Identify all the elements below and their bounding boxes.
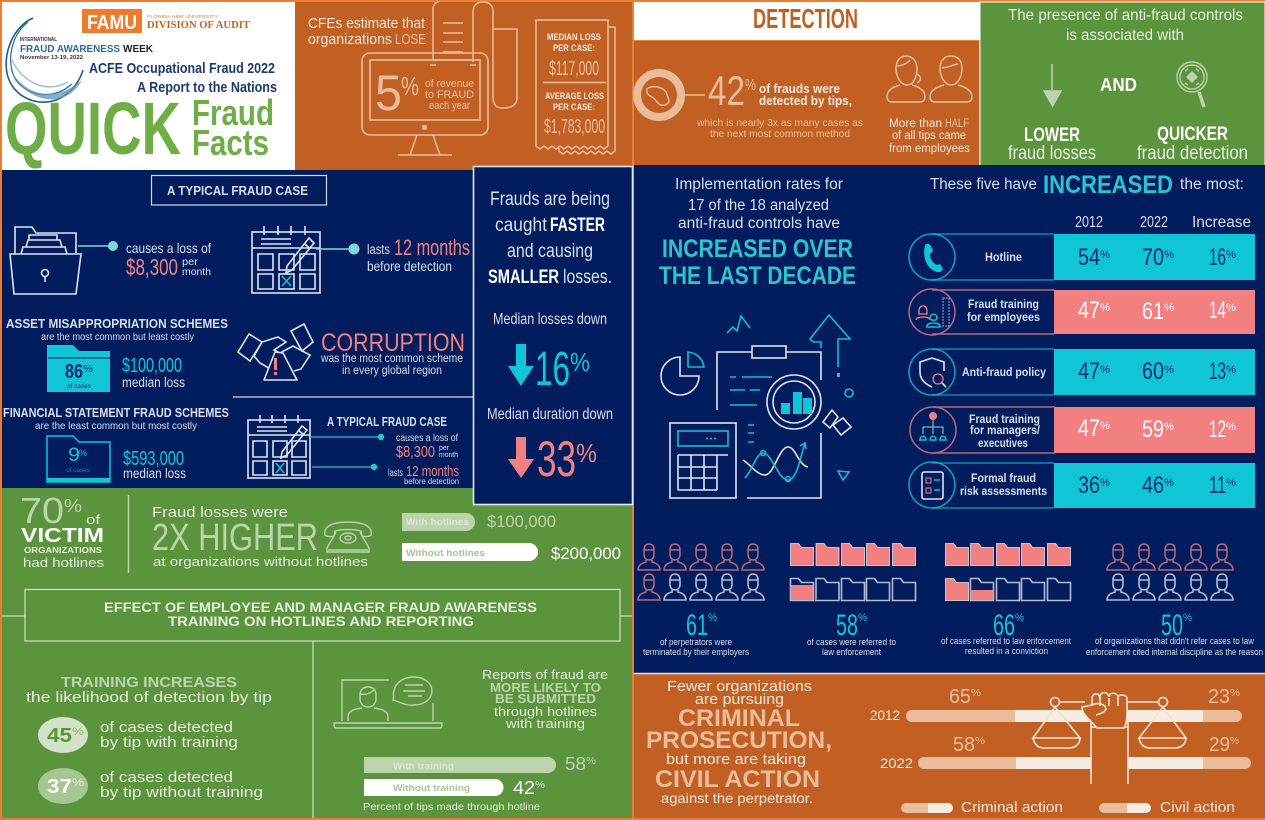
stat: 5% of revenue: of revenue <box>425 78 474 90</box>
panel: implementation rates <box>634 165 1265 673</box>
heading: implementation rates: anti-fraud controls have <box>678 215 840 232</box>
callout: duration <box>316 235 470 274</box>
callout: corruption <box>320 329 465 377</box>
callout: typical fraud case summary: A TYPICAL FRAUD CASE <box>327 415 447 429</box>
text: CFEs estimate <box>308 15 426 48</box>
heading: frauds caught faster <box>488 189 612 288</box>
table row: anti-fraud policy: 13 <box>1209 358 1226 385</box>
chart: tips through hotline <box>363 754 596 813</box>
heading: these five increased: the most: <box>1180 176 1244 193</box>
pictogram: 61% terminated: of perpetrators were <box>660 637 732 648</box>
icon: handshake with warning <box>238 324 313 380</box>
heading: these five increased: INCREASED <box>1043 171 1173 199</box>
table row: fraud training for employees: Fraud training <box>968 299 1039 311</box>
stat: median duration down 33%: % <box>576 438 597 468</box>
callout: loss per month: $8,300 <box>126 254 178 280</box>
receipt: loss per case: $117,000 <box>549 58 599 80</box>
text: criminal prosecution statement: PROSECUTION, <box>646 727 832 754</box>
table row: fraud training for employees: 14 <box>1209 297 1226 324</box>
text: reports more likely: MORE LIKELY TO <box>490 681 601 695</box>
block: financial statement fraud schemes: are the least common but most costly <box>35 420 198 432</box>
table row: fraud training for managers: for managers/ <box>970 425 1041 437</box>
stat: 70% victim organizations: % <box>64 496 82 516</box>
label: quicker fraud detection: fraud detection <box>1137 143 1248 164</box>
callout: typical fraud case summary: causes a loss of <box>396 433 458 444</box>
chart: 2022 action bar: 29 <box>1209 734 1230 756</box>
heading: frauds caught faster: losses. <box>563 267 612 288</box>
text: reports more likely: with training <box>505 717 585 731</box>
callout: duration: 12 months <box>394 235 470 260</box>
table row: hotline: 54 <box>1078 244 1100 271</box>
icon: fist holding scales <box>1033 692 1186 784</box>
text: criminal prosecution statement: are pursuing <box>695 691 784 708</box>
stat: 42% detected by tips: detected by tips, <box>759 94 852 108</box>
heading: a typical fraud case: A TYPICAL FRAUD CASE <box>167 183 308 198</box>
chart: tips through hotline: % <box>535 780 545 791</box>
title: Quick Fraud Facts: Facts <box>192 122 269 163</box>
label: lower fraud losses: fraud losses <box>1008 143 1096 164</box>
chart: tips through hotline: Percent of tips made through hotline <box>363 802 540 813</box>
chart: losses by hotline <box>402 512 621 563</box>
stat: 2x higher: 2X HIGHER <box>152 517 318 559</box>
heading: implementation rates: Implementation rates for <box>675 176 843 193</box>
heading: implementation rates: THE LAST DECADE <box>659 262 856 290</box>
block: training increases detection: TRAINING INCREASES <box>61 675 237 691</box>
callout: typical fraud case summary: before detection <box>404 477 459 486</box>
label: quicker fraud detection: QUICKER <box>1157 124 1228 145</box>
table row: hotline <box>909 234 1255 280</box>
logo: Fraud Awareness Week swoosh <box>6 18 154 102</box>
table row: anti-fraud policy: % <box>1226 364 1236 376</box>
stat: 5% of revenue: each year <box>429 100 470 112</box>
divider <box>233 396 473 398</box>
chart: tips through hotline: 42 <box>513 778 535 798</box>
receipt: loss per case: $1,783,000 <box>544 116 605 138</box>
panel: detection heading: DETECTION <box>753 3 858 34</box>
pictogram: 61% terminated: terminated by their employers <box>643 647 749 658</box>
heading: frauds caught faster: and causing <box>507 241 593 262</box>
table row: fraud training for employees <box>909 289 1255 335</box>
table row: hotline: 70 <box>1142 244 1164 271</box>
title: Quick Fraud Facts: Fraud <box>192 92 274 133</box>
chart: tips through hotline: % <box>586 756 596 767</box>
table header <box>1075 214 1251 231</box>
table row: fraud training for employees: 61 <box>1142 298 1164 325</box>
chart: losses by hotline: $200,000 <box>551 544 621 563</box>
block: asset misappropriation schemes: median loss <box>122 375 185 390</box>
table row: formal fraud risk assessments: % <box>1100 477 1110 489</box>
chart: 2022 action bar: 2022 <box>880 756 913 771</box>
heading: presence of controls: is associated with <box>1066 27 1184 44</box>
block: training increases detection: the likelihood of detection by tip <box>26 689 272 706</box>
callout: corruption: was the most common scheme <box>320 353 463 365</box>
callout: typical fraud case summary: per <box>439 445 450 452</box>
icon: telephone <box>325 522 371 552</box>
table row: hotline: % <box>1226 249 1236 261</box>
callout: loss per month: causes a loss of <box>126 240 211 256</box>
pictogram: 58% referred: 58 <box>836 609 858 642</box>
table row: anti-fraud policy: % <box>1100 364 1110 376</box>
table row: formal fraud risk assessments: % <box>1226 477 1236 489</box>
stat: median losses down 16%: Median losses down <box>493 311 607 328</box>
text: half of tips from employees: of all tips came <box>892 130 966 142</box>
logo: FAMU Division of Audit: FAMU <box>87 12 137 34</box>
callout: loss per month: per <box>182 256 199 268</box>
callout: typical fraud case summary: lasts <box>388 468 403 479</box>
text: criminal prosecution statement: against the perpetrator. <box>661 790 813 806</box>
block: asset misappropriation schemes: 86 <box>65 361 83 383</box>
icon: magnifier <box>1177 62 1207 107</box>
stat: median duration down 33%: Median duration down <box>487 406 613 423</box>
text: half of tips from employees: HALF <box>945 118 969 130</box>
heading: frauds caught faster: SMALLER <box>488 267 559 288</box>
pictogram: 58% referred: law enforcement <box>822 647 881 658</box>
logo: Fraud Awareness Week swoosh: November 13-19, 2022 <box>20 55 83 61</box>
label: lower fraud losses: LOWER <box>1024 125 1080 146</box>
table row: formal fraud risk assessments: 11 <box>1209 472 1226 499</box>
stat: 5% of revenue: % <box>401 71 419 101</box>
heading: presence of controls <box>1008 7 1243 44</box>
icon: file folder <box>10 227 81 294</box>
text: and: AND <box>1100 75 1137 95</box>
illustration: audit clipboard, magnifier and calculator <box>661 315 853 498</box>
icon: whistle ring <box>637 73 705 117</box>
panel: faster and smaller <box>474 166 632 504</box>
text: CFEs estimate: CFEs estimate that <box>308 15 426 32</box>
legend: criminal and civil action <box>901 800 1235 816</box>
callout: loss per month <box>78 240 211 280</box>
callout: corruption: CORRUPTION <box>321 329 465 357</box>
stat: median duration down 33%: 33 <box>537 431 576 487</box>
legend: criminal and civil action: Criminal action <box>961 800 1063 816</box>
receipt: loss per case <box>536 20 615 154</box>
chart: losses by hotline: $100,000 <box>487 512 556 531</box>
block: asset misappropriation schemes: $100,000 <box>122 355 182 377</box>
table row: fraud training for employees: % <box>1164 302 1174 314</box>
stat: median losses down 16% <box>493 311 607 396</box>
table row: formal fraud risk assessments: Formal fraud <box>971 473 1036 485</box>
chart: tips through hotline: Without training <box>393 783 470 794</box>
stat: 42% detected by tips: % <box>745 77 756 94</box>
table row: anti-fraud policy <box>909 349 1255 395</box>
pictogram: 66% conviction <box>941 544 1071 657</box>
table row: fraud training for managers: Fraud training <box>969 414 1040 426</box>
callout: duration: before detection <box>367 259 452 274</box>
table row: anti-fraud policy: Anti-fraud policy <box>962 367 1047 379</box>
logo: FAMU Division of Audit <box>82 9 251 34</box>
pictogram: 61% terminated <box>638 544 764 658</box>
heading: effect of training <box>2 590 632 818</box>
report title: ACFE Occupational Fraud 2022 <box>89 60 275 77</box>
text: criminal prosecution statement: CIVIL ACTION <box>655 766 820 793</box>
block: financial statement fraud schemes <box>3 405 229 482</box>
pictogram: 58% referred: % <box>858 612 867 624</box>
heading: implementation rates: 17 of the 18 analyzed <box>688 197 829 214</box>
callout: typical fraud case summary: $8,300 <box>396 444 435 461</box>
stat: 70% victim organizations: ORGANIZATIONS <box>24 546 103 555</box>
text: half of tips from employees <box>889 118 970 155</box>
chart: 2012 action bar: 23 <box>1208 686 1230 708</box>
text: criminal prosecution statement: Fewer organizations <box>667 678 812 695</box>
table row: fraud training for employees: % <box>1100 302 1110 314</box>
table row: anti-fraud policy: % <box>1164 364 1174 376</box>
stat: 5% of revenue <box>375 65 474 121</box>
block: training increases detection: 37 <box>47 776 72 798</box>
stat: median losses down 16%: 16 <box>535 343 570 396</box>
stat: 42% detected by tips: 42 <box>708 67 745 114</box>
heading: frauds caught faster: caught <box>495 215 548 236</box>
table row: fraud training for managers: % <box>1164 421 1174 433</box>
text: reports more likely: Reports of fraud are <box>482 668 608 682</box>
stat: 70% victim organizations: of <box>86 512 100 527</box>
heading: frauds caught faster: FASTER <box>550 215 605 236</box>
stat: 2x higher <box>152 505 369 569</box>
pictogram: 58% referred <box>790 544 916 658</box>
text: reports more likely: through hotlines <box>494 705 597 719</box>
pictogram: 50% internal discipline <box>1086 544 1263 658</box>
table row: formal fraud risk assessments <box>909 462 1255 508</box>
table header: 2012 <box>1075 214 1103 231</box>
block: financial statement fraud schemes: median loss <box>123 466 186 481</box>
table row: anti-fraud policy: 47 <box>1078 358 1100 385</box>
stat: 2x higher: Fraud losses were <box>152 505 288 521</box>
text: half of tips from employees: from employees <box>889 143 970 155</box>
block: asset misappropriation schemes <box>6 316 228 392</box>
block: training increases detection: of cases detected <box>100 720 233 736</box>
table row: fraud training for managers: 12 <box>1209 416 1226 443</box>
block: financial statement fraud schemes: % <box>79 448 87 458</box>
panel: hotlines and training <box>2 488 632 818</box>
table row: fraud training for managers: % <box>1226 421 1236 433</box>
logo: FAMU Division of Audit: DIVISION OF AUDIT <box>147 19 251 31</box>
chart: 2022 action bar: % <box>975 736 985 747</box>
block: training increases detection: % <box>72 726 84 738</box>
chart: 2012 action bar: % <box>1230 688 1240 699</box>
receipt: loss per case: MEDIAN LOSS <box>547 32 601 43</box>
table row: fraud training for managers: 47 <box>1078 415 1100 442</box>
stat: 70% victim organizations <box>20 490 105 570</box>
receipt: loss per case: PER CASE: <box>553 102 595 113</box>
panel: cost of fraud <box>295 2 632 170</box>
table row: hotline: % <box>1100 249 1110 261</box>
block: training increases detection: % <box>72 777 84 789</box>
stat: 5% of revenue: 5 <box>375 65 402 121</box>
label: quicker fraud detection <box>1137 124 1248 164</box>
panel: masthead <box>2 2 295 170</box>
text: CFEs estimate: organizations <box>308 31 392 48</box>
table row: fraud training for employees: % <box>1226 302 1236 314</box>
text: criminal prosecution statement: CRIMINAL <box>678 705 800 732</box>
logo: Fraud Awareness Week swoosh: FRAUD AWARENESS <box>20 44 120 55</box>
logo: FAMU Division of Audit: FLORIDA A&M UNIVERSITY <box>147 14 218 19</box>
icon: calendar with pen <box>248 415 310 478</box>
chart: losses by hotline: Without hotlines <box>406 548 485 558</box>
stat: median duration down 33% <box>487 406 613 487</box>
stat: 2x higher: at organizations without hotlines <box>153 554 369 569</box>
table row: hotline: % <box>1164 249 1174 261</box>
panel: detection by tips <box>634 41 979 165</box>
table row: formal fraud risk assessments: risk assessments <box>960 486 1047 498</box>
title: Quick Fraud Facts: QUICK <box>5 87 181 170</box>
chart: 2022 action bar <box>880 734 1251 771</box>
icon: person at laptop with speech bubble <box>334 677 442 728</box>
block: training increases detection <box>26 675 272 804</box>
heading: frauds caught faster: Frauds are being <box>490 189 610 210</box>
heading: effect of training: TRAINING ON HOTLINES AND REPORTING <box>168 614 474 629</box>
pictogram: 61% terminated: 61 <box>686 609 708 642</box>
pictogram: 66% conviction: % <box>1015 612 1024 624</box>
pictogram: 50% internal discipline: % <box>1183 612 1192 624</box>
receipt: loss per case: AVERAGE LOSS <box>545 91 604 102</box>
icon: calendar with pen <box>252 226 320 293</box>
pictogram: 61% terminated: % <box>708 612 717 624</box>
table row: fraud training for managers: % <box>1100 420 1110 432</box>
chart: 2012 action bar: % <box>971 688 981 699</box>
table row: formal fraud risk assessments: 36 <box>1078 472 1100 499</box>
panel: detection heading <box>634 2 980 40</box>
stat: 70% victim organizations: 70 <box>20 490 64 531</box>
table row: fraud training for managers: 59 <box>1142 416 1164 443</box>
block: asset misappropriation schemes: are the most common but least costly <box>41 331 195 343</box>
text: criminal prosecution statement <box>646 678 832 806</box>
logo: Fraud Awareness Week swoosh: WEEK <box>123 44 154 55</box>
icon: down arrow <box>1044 64 1061 106</box>
panel: anti-fraud controls <box>980 2 1265 170</box>
stat: 42% detected by tips: which is nearly 3x as many cases as <box>696 117 863 129</box>
chart: tips through hotline: With training <box>393 761 454 772</box>
text: CFEs estimate: LOSE <box>395 31 426 48</box>
stat: 5% of revenue: to FRAUD <box>425 89 474 101</box>
block: financial statement fraud schemes: 9 <box>68 445 80 466</box>
chart: 2012 action bar <box>870 686 1242 723</box>
report title <box>89 60 277 96</box>
report title: A Report to the Nations <box>137 79 277 96</box>
stat: 70% victim organizations: had hotlines <box>23 555 105 570</box>
table row: hotline: Hotline <box>985 252 1022 264</box>
receipt: loss per case: PER CASE: <box>553 43 595 54</box>
table header: Increase <box>1192 214 1251 231</box>
panel: criminal versus civil action <box>634 673 1265 818</box>
pictogram: 66% conviction: 66 <box>993 609 1015 642</box>
block: training increases detection: by tip without training <box>100 785 263 801</box>
heading: a typical fraud case <box>152 176 326 205</box>
chart: losses by hotline: With hotlines <box>406 517 469 527</box>
pictogram: 50% internal discipline: 50 <box>1161 609 1183 642</box>
text: reports more likely: BE SUBMITTED <box>495 692 596 706</box>
table row: fraud training for managers <box>910 407 1255 453</box>
pictogram: 66% conviction: resulted in a conviction <box>965 646 1048 657</box>
block: training increases detection: by tip with training <box>100 735 238 751</box>
stat: 42% detected by tips <box>696 67 863 140</box>
pictogram: 58% referred: of cases were referred to <box>807 637 896 648</box>
text: half of tips from employees: More than <box>889 118 942 130</box>
block: financial statement fraud schemes: $593,000 <box>123 448 184 470</box>
stat: 70% victim organizations: VICTIM <box>21 525 104 547</box>
heading: effect of training: EFFECT OF EMPLOYEE AND MANAGER FRAUD AWARENESS <box>104 600 537 615</box>
panel: a typical fraud case <box>2 170 473 488</box>
heading: implementation rates: INCREASED OVER <box>662 235 853 263</box>
table header: 2022 <box>1140 214 1168 231</box>
chart: 2012 action bar: 65 <box>949 686 971 708</box>
callout: loss per month: month <box>182 266 211 278</box>
table row: anti-fraud policy: 60 <box>1142 358 1164 385</box>
heading: presence of controls: The presence of anti-fraud controls <box>1008 7 1243 24</box>
block: training increases detection: 45 <box>47 725 72 747</box>
table row: formal fraud risk assessments: 46 <box>1142 472 1164 499</box>
block: asset misappropriation schemes: ASSET MISAPPROPRIATION SCHEMES <box>6 316 228 331</box>
heading: these five increased <box>930 171 1244 199</box>
chart: 2022 action bar: 58 <box>953 734 975 756</box>
table row: fraud training for employees: for employees <box>967 312 1040 324</box>
stat: median losses down 16%: % <box>570 347 590 377</box>
chart: 2022 action bar: % <box>1230 736 1239 747</box>
block: financial statement fraud schemes: of cases <box>66 468 90 474</box>
heading: these five increased: These five have <box>930 176 1037 193</box>
logo: Fraud Awareness Week swoosh: INTERNATIONAL <box>20 37 58 43</box>
callout: typical fraud case summary <box>310 415 459 486</box>
label: lower fraud losses <box>1008 125 1096 164</box>
text: criminal prosecution statement: but more are taking <box>666 751 806 768</box>
chart: tips through hotline: 58 <box>565 754 586 774</box>
table row: fraud training for employees: 47 <box>1078 297 1100 324</box>
callout: corruption: in every global region <box>342 365 442 377</box>
block: financial statement fraud schemes: FINANCIAL STATEMENT FRAUD SCHEMES <box>3 405 229 420</box>
text: reports more likely <box>482 668 608 731</box>
callout: typical fraud case summary: 12 months <box>406 463 459 480</box>
block: training increases detection: of cases detected <box>100 770 233 786</box>
block: asset misappropriation schemes: of cases <box>67 384 91 390</box>
stat: 42% detected by tips: of frauds were <box>759 82 840 96</box>
block: asset misappropriation schemes: % <box>83 364 93 375</box>
icon: monitor and receipt <box>362 2 517 155</box>
stat: 42% detected by tips: the next most common method <box>710 128 850 140</box>
icon: two employees <box>887 56 972 102</box>
callout: duration: lasts <box>367 242 390 257</box>
callout: typical fraud case summary: month <box>439 452 458 459</box>
table row: fraud training for managers: executives <box>978 438 1028 450</box>
legend: criminal and civil action: Civil action <box>1160 800 1235 816</box>
table row: formal fraud risk assessments: % <box>1164 477 1174 489</box>
chart: 2012 action bar: 2012 <box>870 708 900 723</box>
pictogram: 66% conviction: of cases referred to law enforcement <box>941 636 1071 647</box>
table row: hotline: 16 <box>1209 244 1226 271</box>
heading: implementation rates <box>659 176 856 290</box>
